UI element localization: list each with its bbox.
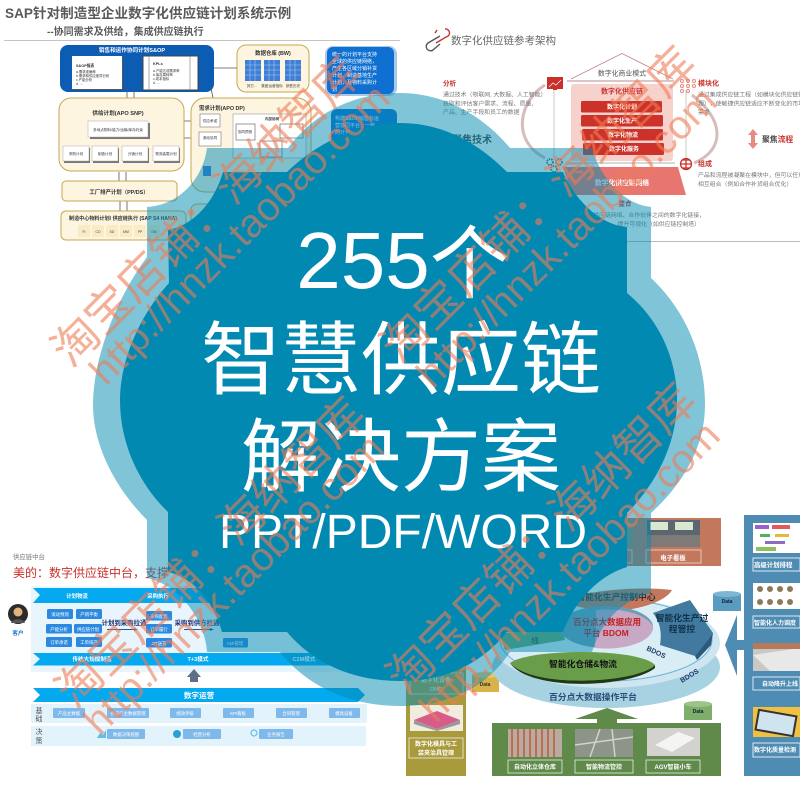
text: modularization: [698, 78, 800, 116]
panel: warehouse logistics: [492, 723, 721, 776]
panel: supply planning: 物流装载计划: [155, 151, 177, 156]
panel: supply planning: [59, 98, 184, 171]
icon: data cylinder yellow: Data: [480, 682, 491, 688]
text: solutions: 解决方案: [241, 413, 561, 502]
sector: control centre: [560, 588, 672, 611]
panel: execution: FI: [82, 230, 86, 234]
text: integration: 供应链网络、合作伙伴之间的数字化链接，: [593, 211, 705, 219]
row: decision: [31, 726, 366, 746]
diagram: house: 数字化供应链: [601, 86, 643, 96]
sector: centre pie: [559, 606, 653, 648]
panel: digital supply chain reference architecture: [426, 29, 800, 242]
panel: factory scheduling: [62, 181, 177, 201]
diagram: house: 数字化供应链网络: [595, 178, 649, 187]
icon: customer avatar: [8, 604, 28, 637]
panel: S&OP: 销售和运作协同计划S&OP: [99, 46, 165, 54]
text: analysis: 产品、生产手段和员工的数据: [443, 108, 520, 116]
label: middle platform: 供应链中台: [13, 552, 45, 561]
panel: demand planning: 协同预测: [238, 129, 253, 134]
sector: warehousing logistics: [510, 652, 655, 681]
buttons: planning: 滚动预测: [51, 611, 69, 618]
panel: digital tooling: 数字化设备: [421, 676, 451, 684]
panel: production apps: 高级计划排程: [754, 560, 793, 569]
panel: data warehouse: 其它...: [247, 83, 257, 88]
text: composition: 组成: [698, 159, 712, 168]
row: decision: 数据决策视图: [113, 731, 140, 738]
buttons: planning: 订单履行: [150, 626, 168, 633]
callout: S&OP tool: 营协同平台，一致: [335, 122, 375, 129]
bar: modes: T+3模式: [188, 655, 209, 663]
watermark: taobao shop: 淘宝店铺：海纳智库: [370, 36, 706, 372]
arrows: cycle: [522, 85, 717, 163]
panel: digital tooling: DNC: [430, 687, 442, 693]
badge: dark cloud: [120, 123, 677, 681]
panel: digital tooling: [406, 640, 466, 776]
panel: S&OP: c.成本指标: [153, 76, 170, 81]
bar: digital operations: [33, 688, 365, 702]
watermark: taobao shop: 淘宝店铺：海纳智库: [41, 47, 371, 376]
diagram: house: 数字化计划: [607, 103, 637, 111]
panel: data warehouse: 集团运营指标: [261, 83, 283, 88]
callout: S&OP tool: [331, 109, 397, 161]
buttons: planning: JIT送货: [152, 640, 167, 647]
text: focus on process: 聚焦流程: [762, 134, 793, 144]
panel: S&OP: KPLs: [153, 62, 163, 66]
panel: S&OP: d. ...: [76, 82, 83, 86]
panel: execution: SD: [110, 230, 115, 234]
row: foundation: 供应商主数据管理: [110, 710, 146, 717]
diagram: house: 数字化物流: [608, 131, 638, 139]
watermark: taobao shop: 淘宝店铺：海纳智库: [45, 388, 375, 717]
panel: Midea supply chain middle platform: [8, 552, 368, 746]
arrow: plan to purchase: 计划到采购拉通: [102, 618, 147, 627]
arrow: into platform: [725, 615, 745, 676]
heading: SAP title: SAP针对制造型企业数字化供应链计划系统示例: [5, 5, 291, 21]
buttons: planning: 订单承诺: [50, 639, 68, 646]
panel: digital tooling: 数字化模具与工: [415, 740, 457, 748]
chart: big data platform disk: [492, 588, 720, 708]
panel: digital tooling: 装夹治具管理: [418, 749, 454, 757]
buttons: planning: 产能分析: [50, 626, 68, 633]
panel: execution: MM: [123, 230, 129, 234]
callout: unified planning platform: 计划，及物料采购计: [332, 79, 377, 86]
watermark: taobao shop: 淘宝店铺：海纳智库: [376, 374, 706, 703]
arrow: up: [187, 669, 201, 682]
text: analysis: [443, 78, 546, 116]
chart: big data platform disk: 线: [531, 635, 539, 645]
icon: customer avatar: 客户: [12, 629, 24, 637]
buttons: planning: 供应链计划: [77, 626, 99, 633]
text: modularization: 需求: [698, 108, 710, 116]
panel: execution: CO: [95, 230, 101, 234]
watermark: taobao shop: http://hnzk.taobao.com: [408, 79, 726, 396]
chart: big data platform disk: 百分点大数据操作平台: [549, 691, 637, 702]
heading: architecture title: 数字化供应链参考架构: [451, 34, 556, 47]
panel: demand planning: 供应承诺: [203, 118, 218, 123]
panel: supply planning: 采购计划: [69, 151, 84, 156]
chart: big data platform disk: 智能化生产过: [656, 612, 709, 623]
panel: execution: PP: [138, 230, 143, 234]
subheading: collaboration: --协同需求及供给，集成供应链执行: [47, 25, 204, 38]
row: decision: 业务报告: [267, 731, 285, 738]
panel: S&OP: S&OP报表: [76, 63, 95, 68]
row: foundation: [31, 704, 367, 723]
panel: data warehouse: 销售历史: [286, 83, 301, 88]
arrow: purchase to supplier: 采购到供方拉通: [175, 618, 220, 627]
arrow: purchase to supplier: [175, 618, 220, 631]
callout: unified planning platform: 统一的计划平台支持: [332, 51, 377, 58]
row: foundation: 绩效评级: [176, 710, 194, 717]
panel: data warehouse: 数据仓库 (BW): [255, 49, 291, 57]
chart: big data platform disk: 智能化仓储&物流: [549, 658, 617, 669]
text: composition: [698, 159, 800, 188]
row: decision: 决: [36, 727, 42, 736]
text: analysis: 分析: [443, 78, 456, 88]
icon: chain link: [426, 29, 450, 51]
chart: big data platform disk: 程管控: [669, 623, 695, 634]
text: focus on technology: 聚焦技术: [452, 133, 492, 146]
watermark: taobao shop: [41, 36, 729, 743]
panel: production apps: 自动降升上线: [762, 680, 798, 688]
panel: data warehouse: [237, 45, 309, 92]
row: foundation: 础: [36, 714, 42, 723]
panel: demand planning: 滚动协同: [203, 135, 218, 140]
callout: unified planning platform: 计划、制造基地生产: [332, 72, 377, 79]
panel: demand planning: 需求计划(APO DP): [199, 104, 245, 112]
panel: production apps: [744, 515, 800, 776]
text: formats: PPT/PDF/WORD: [219, 506, 587, 559]
icon: globe: [680, 158, 692, 170]
text: integration: [593, 198, 705, 228]
callout: unified planning platform: 划: [332, 86, 337, 93]
text: count: 255: [296, 216, 430, 305]
text: integration: 提升可视化（如供应链控制塔）: [618, 220, 700, 228]
callout: unified planning platform: 全球的供应链网络，: [332, 58, 377, 65]
panel: S&OP: [60, 45, 214, 92]
panel: warehouse logistics: 智能物流管控: [586, 763, 622, 771]
panel: S&OP: d. ...: [153, 81, 160, 85]
panel: S&OP: a.需求准确率: [76, 69, 96, 74]
row: foundation: 合同管理: [282, 710, 300, 717]
text: smart supply chain: 智慧供应链: [201, 316, 601, 405]
buttons: planning: 工单排产: [80, 639, 98, 646]
panel: execution: GM: [151, 230, 157, 234]
callout: unified planning platform: 产生各区域分销补货: [332, 65, 377, 72]
row: foundation: 基: [36, 706, 42, 715]
panel: SAP planning system example: [4, 5, 400, 240]
callout: S&OP tool: 构建S&OP销售与运: [335, 115, 379, 122]
row: decision: 策: [36, 736, 42, 745]
panel: S&OP: c.产能分析: [76, 77, 93, 82]
panel: execution: 制造中心物料计划/ 供应链执行 (SAP S4 HANA): [69, 215, 177, 222]
sector: production line: [500, 618, 565, 650]
panel: execution: [61, 204, 281, 240]
arrow: up into disk: [575, 708, 638, 723]
bar: plan logistics: 采购执行: [147, 592, 169, 600]
panel: S&OP: b.库存周转率: [153, 72, 173, 77]
buttons: planning: 采购配售: [150, 613, 168, 620]
arrows: connectors: [78, 68, 237, 211]
chart: big data platform disk: 智能化生产控制中心: [576, 591, 656, 602]
icon: monitor chart: [547, 77, 563, 90]
row: foundation: 产品主数据: [58, 710, 81, 717]
panel: supply planning: 多地点物料/能力/运输/库存约束: [93, 127, 143, 132]
badge: light translucent cloud: [93, 93, 705, 706]
heading: Midea: 美的：数字供应链中台，支撑: [13, 565, 169, 580]
chart: big data platform disk: BDOS: [679, 668, 700, 685]
panel: demand planning: 内部协同: [265, 116, 280, 121]
row: decision: 经营分析: [193, 731, 211, 738]
panel: supply planning: 供给计划(APO SNP): [92, 109, 144, 117]
panel: factory scheduling: 工厂排产计划（PP/DS）: [89, 188, 149, 196]
bar: modes: 传统大规模制造: [72, 655, 112, 663]
text: count: 个: [430, 220, 510, 309]
panel: smart production diagram: [406, 515, 800, 776]
icon: module dots: [680, 80, 696, 92]
buttons: planning: [46, 609, 248, 648]
arrow: focus process: [748, 129, 758, 149]
diagram: house: 数字化商业模式: [598, 68, 646, 78]
panel: electronic board: [600, 518, 721, 566]
panel: warehouse logistics: 自动化立体仓库: [514, 763, 556, 771]
text: analysis: 通过技术（物联网, 大数据、人工智能）: [443, 90, 546, 98]
chart: big data platform disk: 百分点大数据应用: [573, 617, 641, 627]
callout: unified planning platform: [325, 46, 397, 96]
icon: data cylinder blue: [713, 591, 741, 611]
diagram: house: 数字化生产: [607, 117, 637, 125]
row: foundation: KPI看板: [230, 710, 247, 717]
icon: data cylinder green: [684, 701, 712, 720]
text: analysis: 获取和评估客户需求、流程、质量、: [443, 100, 537, 108]
arrow: plan to purchase: [102, 618, 147, 631]
panel: warehouse logistics: AGV智能小车: [654, 763, 692, 771]
panel: production apps: 智能化人力调度: [754, 619, 796, 627]
bar: plan logistics: 计划物流: [66, 592, 88, 600]
text: integration: 整合: [618, 198, 632, 208]
buttons: planning: VMI管理: [227, 640, 244, 647]
icon: data cylinder green: Data: [693, 709, 704, 715]
text: composition: 相互组合（例如合作补货组合优化）: [698, 180, 792, 188]
diagram: house: [554, 54, 686, 195]
icon: data cylinder blue: Data: [722, 599, 733, 605]
sector: process control: [653, 600, 713, 656]
row: foundation: 模具设备: [335, 710, 353, 717]
icon: gears: [547, 159, 562, 172]
text: modularization: 模块化: [698, 78, 719, 88]
panel: demand planning: [191, 98, 311, 192]
watermark: taobao shop: http://hnzk.taobao.com: [81, 76, 399, 393]
chart: big data platform disk: BDOS: [645, 645, 667, 660]
panel: S&OP: b.需求和供应差异分析: [76, 73, 110, 78]
bar: digital operations: 数字运营: [184, 690, 215, 700]
panel: supply planning: 制造计划: [98, 151, 113, 156]
panel: production apps: 数字化质量检测: [754, 746, 796, 754]
watermark: taobao shop: http://hnzk.taobao.com: [75, 426, 393, 743]
panel: supply planning: 分销计划: [128, 151, 143, 156]
title: main headline: [201, 216, 601, 559]
bar: modes: [33, 653, 337, 666]
diagram: house: 数字化服务: [609, 145, 639, 153]
callout: S&OP tool: 的计划: [335, 129, 350, 136]
bar: plan logistics: [33, 588, 246, 603]
chart: big data platform disk: 平台 BDOM: [583, 628, 629, 638]
bar: modes: C2M模式: [292, 655, 316, 663]
buttons: planning: 产销平衡: [80, 611, 98, 618]
watermark: taobao shop: http://hnzk.taobao.com: [411, 413, 729, 730]
icon: data cylinder yellow: [472, 672, 499, 692]
panel: S&OP: a.产能达成需求率: [153, 68, 180, 73]
panel: electronic board: 电子看板: [660, 553, 686, 562]
